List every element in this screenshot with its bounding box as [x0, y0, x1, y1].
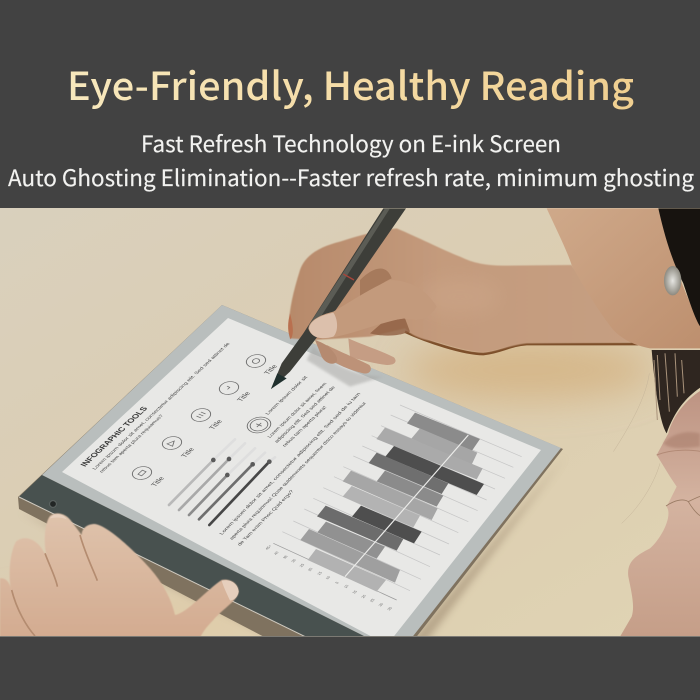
hair strands [613, 350, 700, 523]
grid lines [273, 405, 522, 600]
screen content: population bar chart [265, 405, 522, 611]
axis tick labels: 35 [282, 555, 289, 559]
icon 3 [190, 408, 212, 422]
axis tick labels: 40 [273, 551, 280, 555]
screen content: intro text: rebus tam aperta plura requiamus? [98, 414, 165, 474]
icon 1 [132, 466, 152, 480]
axis tick labels: 10 [325, 576, 331, 580]
axis tick labels [265, 544, 393, 611]
screen content: intro text: Lorem ipsum dolor sit amet, consectetur adipiscing elit. Sed sed attinet de [91, 342, 232, 471]
photo bottom edge [0, 636, 700, 638]
axis tick labels: 15 [317, 571, 323, 576]
bezel edge highlight [19, 497, 310, 639]
screen content: lower paragraph: Lorem ipsum dolor sit amet, consectetur adipiscing elit. Sed sed de iu tam [218, 392, 362, 536]
thumb nail [309, 313, 337, 338]
screen content: upper right paragraph: adipiscing elit. Sed sed attinet de [273, 385, 337, 444]
icon 4 [218, 381, 240, 395]
title: Eye-Friendly, Healthy Reading [67, 56, 634, 112]
screen content: upper right paragraph: Lorem ipsum dolor sit [264, 375, 310, 416]
table surface [0, 208, 700, 649]
e-ink screen [62, 318, 541, 640]
right hand and arm [271, 208, 632, 389]
palm shadow on screen [306, 348, 376, 387]
pen highlight [308, 208, 390, 328]
axis tick labels: 25 [299, 563, 305, 568]
hair top [658, 208, 700, 328]
middle finger [348, 338, 396, 365]
chart centre axis [345, 435, 468, 577]
subtitle line 2: Auto Ghosting Elimination--Faster refresh rate, minimum ghosting [8, 161, 694, 193]
little finger [315, 340, 337, 364]
hand [289, 228, 632, 353]
pen red ring [343, 274, 354, 280]
bars [300, 413, 484, 592]
axis tick labels: 20 [361, 594, 367, 599]
screen content: lower paragraph: aperta plura requirimus! Quae quidemmets sequentur disco essays to videntur [228, 401, 369, 541]
axis tick labels: 30 [291, 559, 297, 563]
camera dot [50, 501, 56, 507]
screen content: icon titles: Title [150, 476, 166, 488]
left index finger nail on tablet edge [288, 313, 293, 339]
screen content: icon titles [150, 364, 279, 488]
screen content: upper right paragraph: Lorem ipsum dolor sit amet, finem [266, 382, 329, 439]
finger shadow [360, 268, 392, 297]
screen content: slider bars [169, 439, 275, 525]
axis tick labels: 35 [387, 607, 393, 611]
icon 5 [246, 354, 266, 368]
axis tick labels: 25 [369, 598, 376, 603]
axis tick labels: 10 [343, 584, 350, 589]
axis tick labels: 5 [335, 581, 340, 584]
earring [664, 266, 681, 295]
thumb [308, 280, 437, 338]
pen tip [271, 373, 287, 389]
screen content: icon titles: Title [263, 364, 279, 376]
icon 2 [162, 436, 182, 450]
tablet rim [18, 305, 563, 640]
axis tick labels: 30 [378, 603, 384, 607]
tablet body [18, 305, 563, 640]
silver frame [42, 305, 561, 640]
axis tick labels: 15 [352, 590, 358, 594]
fingertip highlight [50, 514, 67, 519]
arm shadow on table [405, 332, 640, 354]
photo: person writing on e-ink tablet [0, 208, 700, 650]
screen content: lower paragraph: de Tam enim Phoc Quid ergo? [236, 489, 296, 547]
screen content: icon row [128, 352, 276, 482]
neck [547, 208, 700, 348]
hand highlight [420, 278, 500, 315]
ring finger [327, 345, 371, 374]
palm crease [370, 318, 410, 336]
axis tick labels: 20 [307, 567, 314, 572]
face and chin [620, 390, 700, 637]
screen content: upper right paragraph: rebus tam aperta plura! [281, 405, 329, 448]
screen content: intro text [91, 342, 232, 474]
screen content: icon titles: Title [180, 447, 196, 459]
tablet shadow [38, 484, 544, 636]
screen content: upper right paragraph [264, 375, 337, 448]
dark bezel [19, 475, 372, 640]
thumb nail [222, 580, 239, 601]
axis tick labels: 45+ [265, 544, 273, 550]
finger lines [12, 535, 97, 636]
left hand [0, 513, 239, 638]
screen content: heading: INFOGRAPHIC TOOLS [79, 405, 150, 468]
pen [271, 208, 406, 389]
screen content: icon titles: Title [208, 419, 224, 431]
subtitle line 1: Fast Refresh Technology on E-ink Screen [141, 127, 561, 159]
screen content: lower paragraph [218, 392, 369, 547]
icon 6 plus [246, 416, 272, 434]
screen content: icon titles: Title [236, 391, 252, 403]
